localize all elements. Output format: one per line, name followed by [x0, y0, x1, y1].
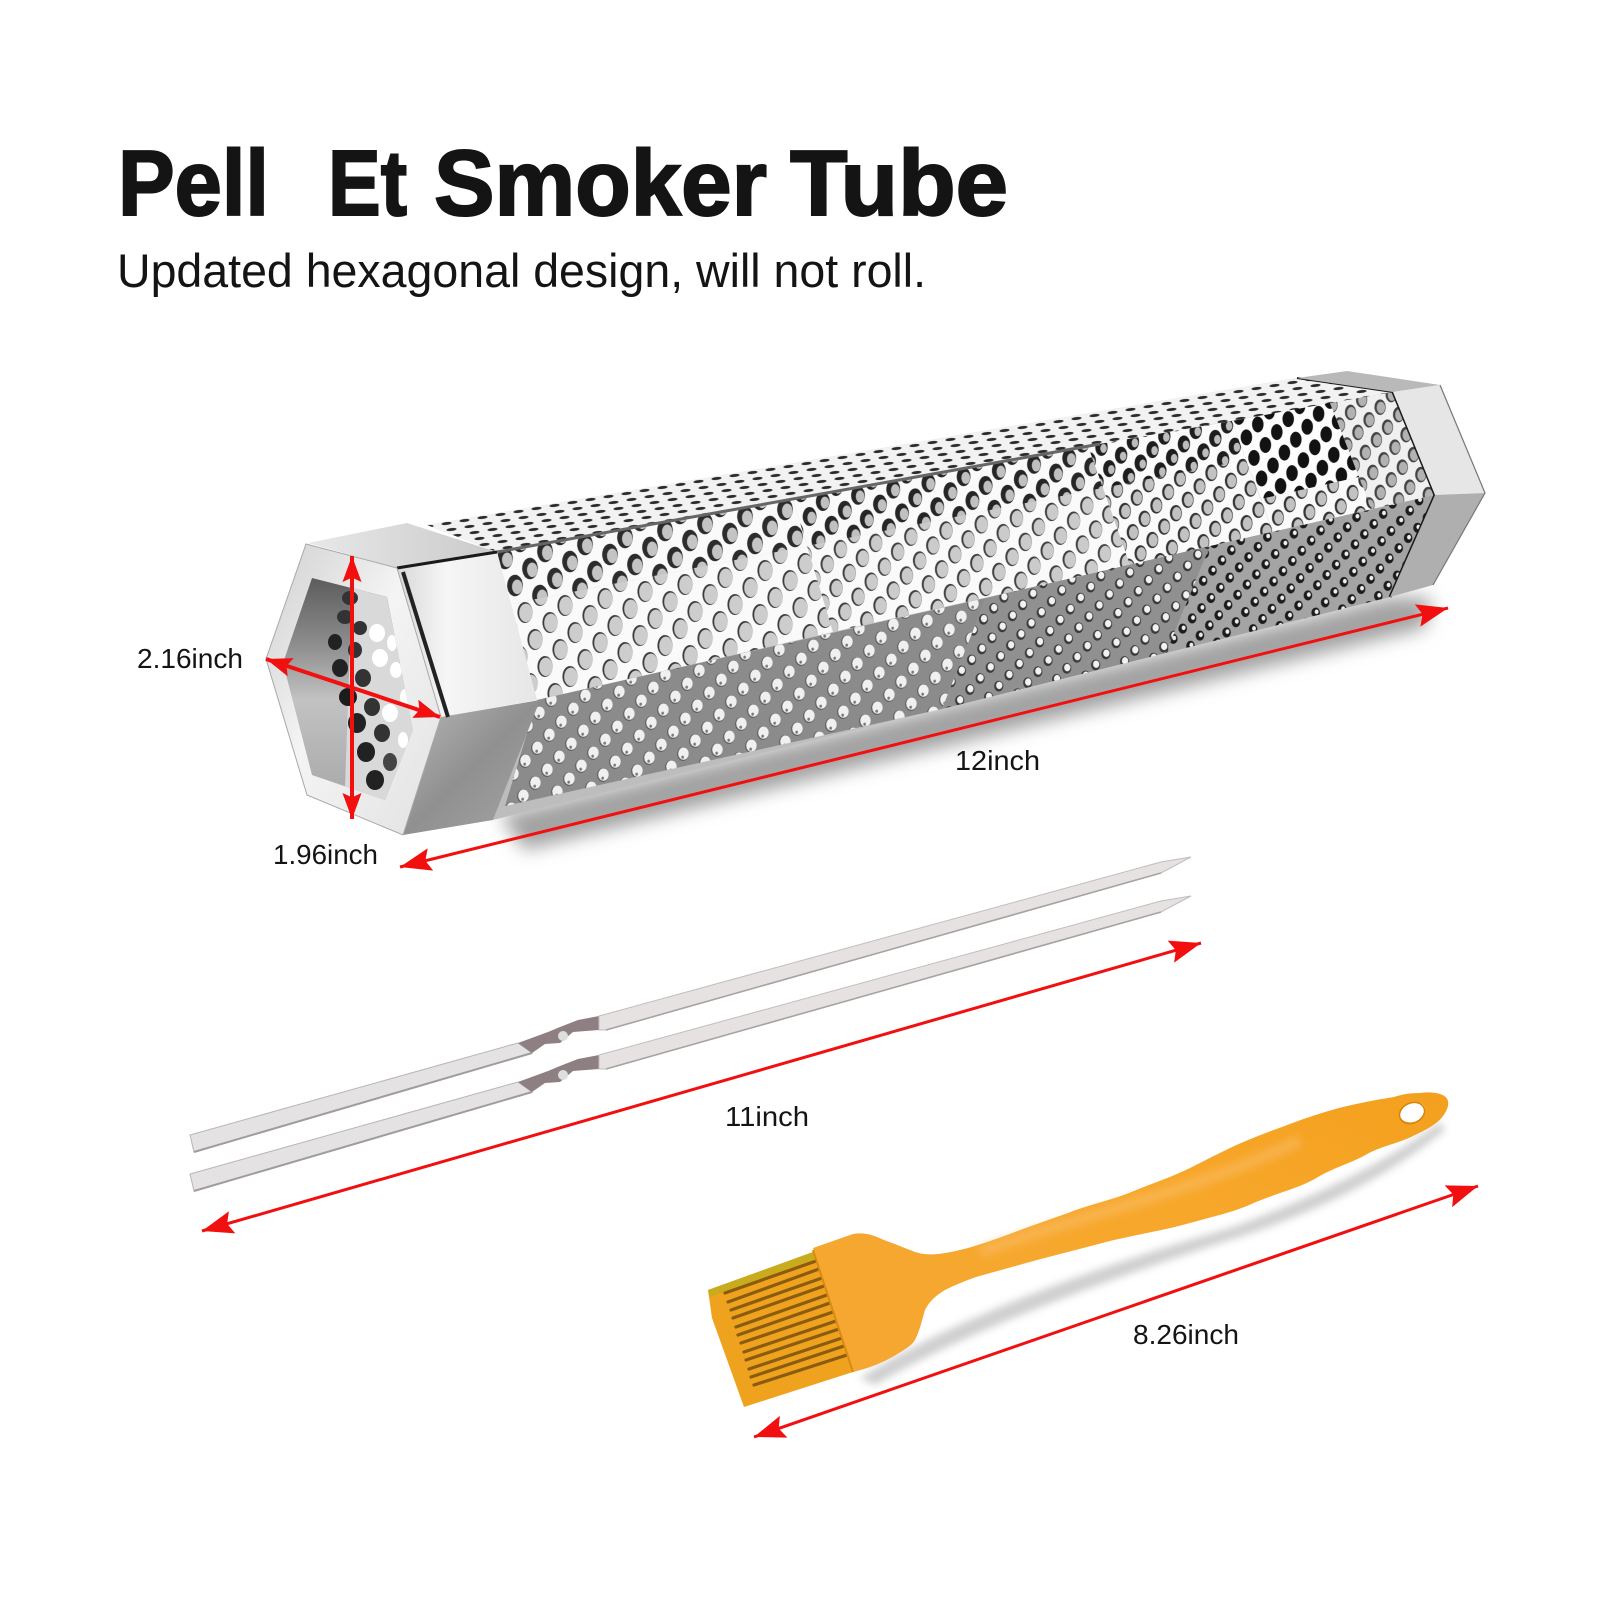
dimension arrow: hexagon height 1.96 inch — [350, 556, 354, 819]
label: 1.96inch: 1.96inch — [273, 839, 378, 870]
label: 2.16inch: 2.16inch — [137, 643, 243, 674]
title: Pell — [118, 131, 269, 235]
title: Smoker — [434, 131, 767, 235]
infographic canvas — [120, 146, 1486, 1438]
silicone basting brush — [708, 1092, 1448, 1407]
dimension arrow: skewer length 11 inch — [202, 943, 1201, 1231]
near end cap collar — [308, 523, 540, 835]
head edge — [813, 1250, 853, 1372]
far end cap — [1297, 371, 1485, 597]
handle and head — [813, 1092, 1448, 1372]
brush shadow — [860, 1122, 1445, 1385]
tube shadow — [500, 597, 1432, 850]
bristles — [708, 1252, 853, 1407]
label: 8.26inch: 8.26inch — [1133, 1319, 1239, 1350]
label: 11inch: 11inch — [725, 1101, 809, 1132]
dimension arrow: tube length 12 inch — [400, 608, 1448, 867]
dimension arrow: brush length 8.26 inch — [754, 1186, 1478, 1437]
subtitle: Updated hexagonal design, will not roll. — [117, 244, 926, 297]
perforated tube body — [427, 378, 1435, 820]
smoker tube product image — [266, 371, 1485, 850]
title: Tube — [790, 131, 1008, 235]
skewers — [190, 857, 1191, 1191]
skewer 2 — [190, 896, 1191, 1191]
dimension arrow: hexagon width 2.16 inch — [266, 659, 440, 717]
label: 12inch: 12inch — [955, 745, 1040, 776]
title: Et — [328, 131, 407, 235]
title — [118, 131, 1008, 235]
hanging hole rim — [1396, 1098, 1428, 1128]
hexagonal front opening — [266, 544, 441, 835]
skewer 1 — [190, 857, 1191, 1152]
handle highlight — [980, 1140, 1300, 1252]
